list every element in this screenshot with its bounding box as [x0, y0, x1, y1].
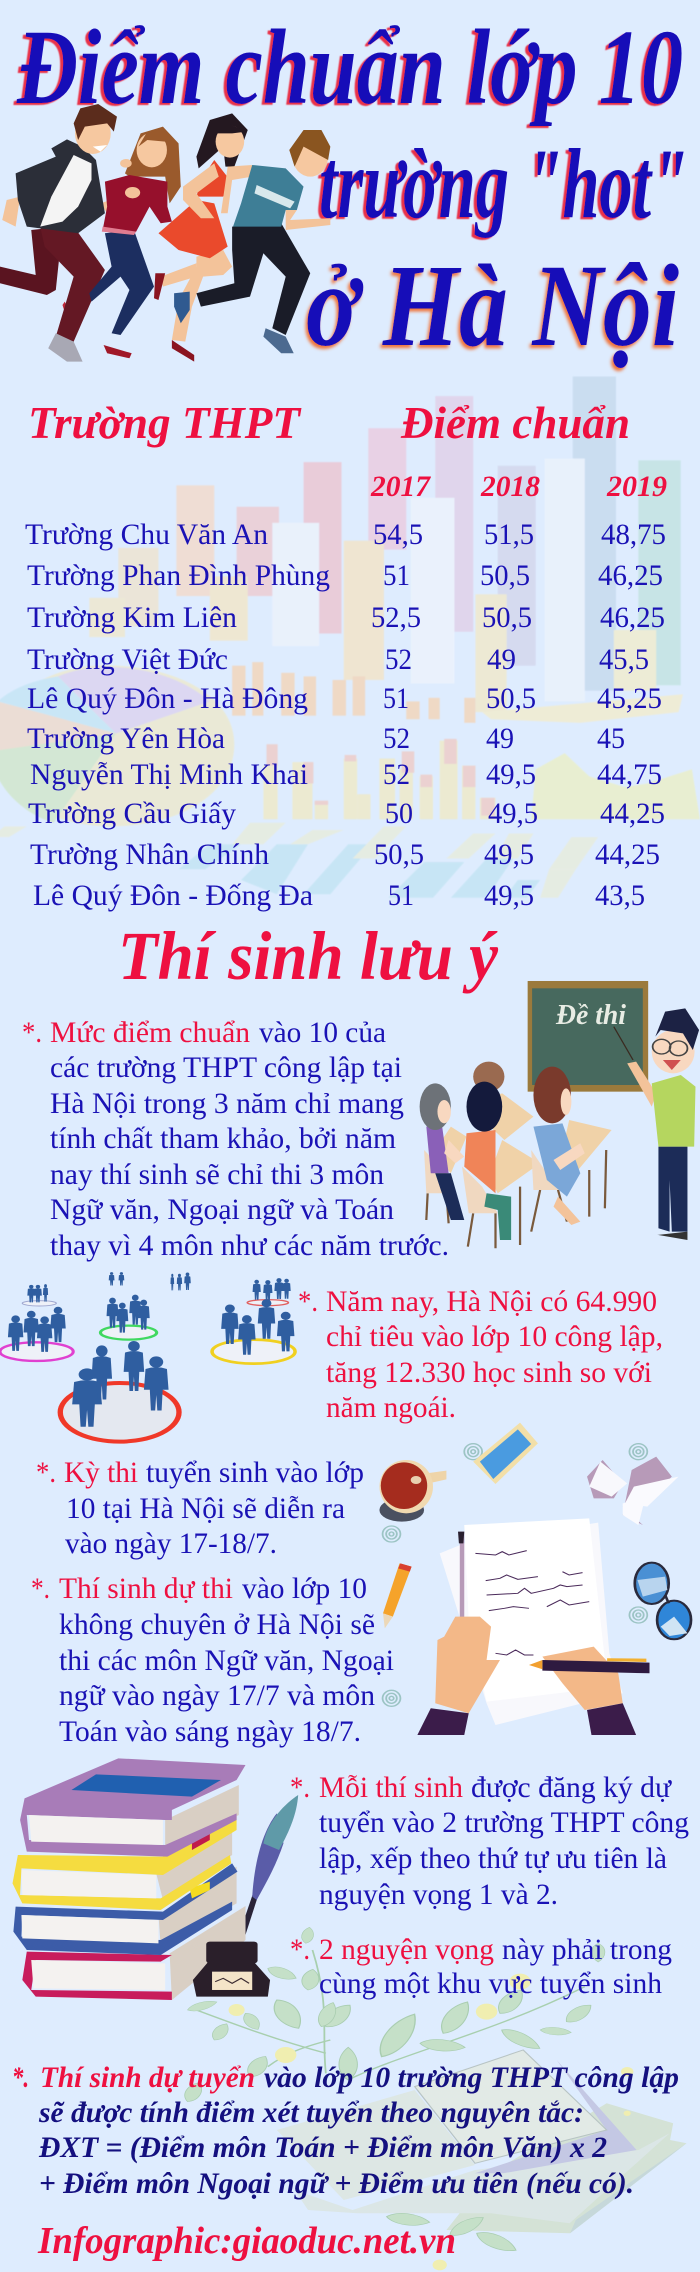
note: same enrolment area: này phải trong: [502, 1933, 672, 1966]
school score table: Trường Yên Hòa: [27, 722, 225, 755]
school score table: 52: [383, 722, 410, 755]
pencil: [383, 1563, 412, 1628]
school score table: [25, 518, 666, 912]
year headers: 2017: [370, 470, 431, 503]
school score table: Trường Việt Đức: [27, 643, 228, 676]
background chart illustration: [0, 376, 700, 898]
note: exam subjects: Toán vào sáng ngày 18/7.: [59, 1715, 361, 1748]
heading: Trường THPT: Trường THPT: [28, 398, 302, 448]
school score table: 48,75: [601, 518, 666, 551]
note: enrolment quota: năm ngoái.: [326, 1391, 456, 1424]
note: exam dates: *.: [36, 1456, 56, 1489]
school score table: 50,5: [374, 838, 424, 871]
school score table: 52,5: [371, 601, 421, 634]
note: exam subjects: vào lớp 10: [242, 1572, 367, 1605]
school score table: 50: [385, 797, 413, 830]
school score table: 45: [597, 722, 625, 755]
note: scoring formula: ĐXT = (Điểm môn Toán + Điểm môn Văn) x 2: [38, 2131, 607, 2164]
note: two wishes: Mỗi thí sinh: [319, 1771, 463, 1804]
phone: [473, 1423, 538, 1484]
note: two wishes: *.: [290, 1771, 310, 1804]
note: exam subjects: ngữ vào ngày 17/7 và môn: [59, 1679, 375, 1712]
note: same enrolment area: [290, 1933, 672, 2000]
school score table: 49,5: [486, 758, 536, 791]
runner 3: [154, 113, 248, 362]
note: enrolment quota: *.: [298, 1285, 318, 1318]
note: exam subjects: [31, 1572, 394, 1748]
note: exam subjects: không chuyên ở Hà Nội sẽ: [59, 1608, 375, 1641]
runner 4: [174, 130, 330, 353]
note: enrolment quota: [298, 1285, 663, 1424]
source credit: Infographic:giaoduc.net.vn: [37, 2220, 456, 2262]
school score table: Nguyễn Thị Minh Khai: [30, 758, 308, 791]
school score table: Trường Nhân Chính: [30, 838, 269, 871]
illustration: writing desk with paper, hands and items: [379, 1423, 691, 1735]
back of open book: [446, 2103, 687, 2233]
note: benchmark scores: tính chất tham khảo, bởi năm: [50, 1122, 396, 1155]
note: two wishes: lập, xếp theo thứ tự ưu tiên là: [319, 1842, 667, 1875]
school score table: 52: [383, 758, 410, 791]
note: enrolment quota: Năm nay, Hà Nội có 64.990: [326, 1285, 657, 1318]
tea cup: [379, 1460, 446, 1522]
note: same enrolment area: 2 nguyện vọng: [319, 1933, 494, 1966]
feather: [237, 1795, 298, 1942]
students at desks: [420, 1062, 612, 1248]
note: benchmark scores: thay vì 4 môn như các năm trước.: [50, 1229, 449, 1262]
red book: [22, 1906, 246, 2000]
title: [16, 9, 688, 371]
note: same enrolment area: *.: [290, 1933, 310, 1966]
school score table: 51: [383, 682, 409, 715]
purple book: [20, 1758, 246, 1857]
school score table: 46,25: [598, 559, 663, 592]
note: scoring formula: vào lớp 10 trường THPT công lập: [264, 2061, 679, 2094]
note: exam dates: 10 tại Hà Nội sẽ diễn ra: [66, 1492, 345, 1525]
school score table: 51: [388, 879, 414, 912]
background illustration: plant and open book: [181, 1926, 687, 2270]
illustration: stack of books with ink and feather: [12, 1758, 298, 2000]
school score table: 44,75: [597, 758, 662, 791]
school score table: Trường Kim Liên: [27, 601, 237, 634]
note: enrolment quota: tăng 12.330 học sinh so với: [326, 1356, 652, 1389]
blackboard label: Đề thi: [555, 1000, 626, 1031]
school score table: 49,5: [484, 838, 534, 871]
school score table: 50,5: [480, 559, 530, 592]
note: two wishes: tuyển vào 2 trường THPT công: [319, 1806, 689, 1839]
year headers: 2019: [606, 470, 667, 503]
note: scoring formula: Thí sinh dự tuyển: [40, 2061, 255, 2094]
school score table: 46,25: [600, 601, 665, 634]
note: benchmark scores: nay thí sinh sẽ chỉ thi 3 môn: [50, 1158, 384, 1191]
school score table: 43,5: [595, 879, 645, 912]
note: exam subjects: Thí sinh dự thi: [59, 1572, 233, 1605]
school score table: Lê Quý Đôn - Đống Đa: [33, 879, 313, 912]
teacher: [614, 1008, 699, 1240]
note: benchmark scores: [22, 1016, 449, 1262]
school score table: 50,5: [482, 601, 532, 634]
illustration: four running students: [0, 104, 330, 362]
hands and pen: [417, 1532, 650, 1735]
school score table: 50,5: [486, 682, 536, 715]
note: same enrolment area: cùng một khu vực tuyển sinh: [319, 1967, 662, 2000]
ink bottle: [193, 1942, 270, 1997]
school score table: 49,5: [488, 797, 538, 830]
note: scoring formula: sẽ được tính điểm xét tuyển theo nguyên tắc:: [38, 2096, 584, 2129]
note: exam dates: tuyển sinh vào lớp: [146, 1456, 364, 1489]
year headers: [370, 470, 667, 503]
school score table: 52: [385, 643, 412, 676]
illustration: groups of people in rings: [0, 1272, 295, 1442]
school score table: Lê Quý Đôn - Hà Đông: [27, 682, 308, 715]
school score table: Trường Phan Đình Phùng: [27, 559, 330, 592]
school score table: 49: [487, 643, 516, 676]
school score table: 44,25: [595, 838, 660, 871]
sheets of paper: [440, 1518, 623, 1725]
note: scoring formula: + Điểm môn Ngoại ngữ + Điểm ưu tiên (nếu có).: [39, 2167, 634, 2200]
open book pages: [475, 2060, 637, 2173]
school score table: Trường Chu Văn An: [25, 518, 268, 551]
school score table: 54,5: [373, 518, 423, 551]
heading: Thí sinh lưu ý: Thí sinh lưu ý: [118, 918, 498, 994]
runner 1: [0, 104, 141, 362]
note: benchmark scores: *.: [22, 1016, 42, 1049]
note: benchmark scores: Hà Nội trong 3 năm chỉ mang: [50, 1087, 404, 1120]
paper scraps: [587, 1457, 679, 1525]
table headers: [28, 398, 667, 503]
note: benchmark scores: Ngữ văn, Ngoại ngữ và Toán: [50, 1193, 394, 1226]
blackboard: [528, 981, 648, 1092]
note: two wishes: được đăng ký dự: [471, 1771, 673, 1804]
note: exam dates: [36, 1456, 364, 1560]
school score table: 49,5: [484, 879, 534, 912]
note: scoring formula: [12, 2061, 679, 2200]
heading: Điểm chuẩn: Điểm chuẩn: [400, 398, 630, 448]
yellow book: [12, 1815, 237, 1910]
school score table: 49: [486, 722, 514, 755]
year headers: 2018: [480, 470, 540, 503]
illustration: teacher and students: [420, 981, 699, 1248]
school score table: 51,5: [484, 518, 534, 551]
note: two wishes: [290, 1771, 689, 1911]
school score table: 44,25: [600, 797, 665, 830]
runner 2: [89, 127, 181, 358]
note: exam dates: Kỳ thi: [64, 1456, 138, 1489]
blue book: [13, 1863, 237, 1955]
note: two wishes: nguyện vọng 1 và 2.: [319, 1878, 558, 1911]
glasses: [635, 1563, 691, 1639]
note: enrolment quota: chỉ tiêu vào lớp 10 công lập,: [326, 1320, 663, 1353]
note: exam subjects: *.: [31, 1572, 50, 1605]
note: scoring formula: *.: [12, 2061, 29, 2094]
school score table: Trường Cầu Giấy: [28, 797, 236, 830]
school score table: 51: [383, 559, 410, 592]
note: exam subjects: thi các môn Ngữ văn, Ngoại: [59, 1644, 394, 1677]
school score table: 45,25: [597, 682, 662, 715]
school score table: 45,5: [599, 643, 649, 676]
note: benchmark scores: các trường THPT công lập tại: [50, 1051, 402, 1084]
note: exam dates: vào ngày 17-18/7.: [65, 1527, 277, 1560]
swirls: [383, 1444, 647, 1706]
note: benchmark scores: vào 10 của: [259, 1016, 386, 1049]
note: benchmark scores: Mức điểm chuẩn: [50, 1016, 250, 1049]
